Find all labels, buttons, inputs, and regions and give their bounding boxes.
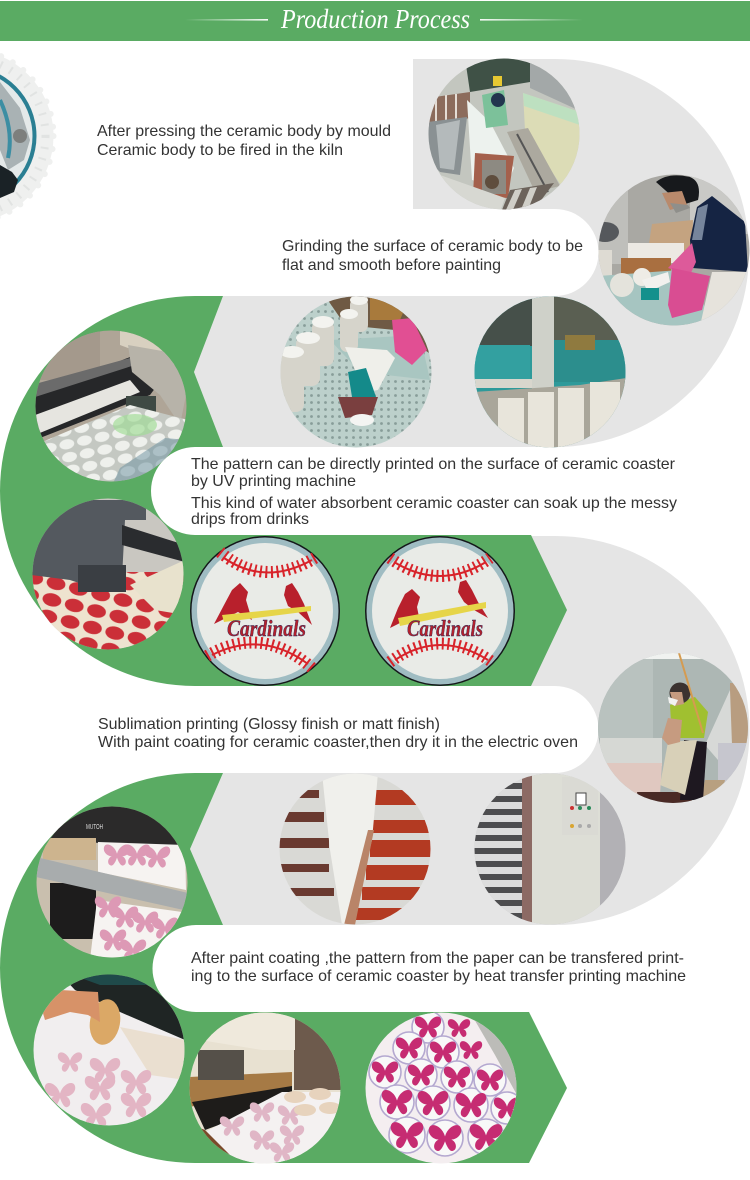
photo: UV printing machine xyxy=(35,330,188,490)
text: step 1 pressing and firing: After pressing the ceramic body by mould xyxy=(97,123,391,140)
photo: UV print on red coasters xyxy=(32,498,185,651)
panel: UV printing green arrow xyxy=(0,296,567,686)
text: step 5 heat transfer: After paint coating ,the pattern from the paper can be transfered print- xyxy=(191,950,684,967)
label: machine brand: MUTOH xyxy=(86,824,103,831)
text: step 3 UV printing: This kind of water absorbent ceramic coaster can soak up the messy xyxy=(191,495,677,512)
photo: red oven racks xyxy=(279,773,431,925)
photo: grinding coaster close-up xyxy=(280,295,432,448)
photo: heat press xyxy=(189,1012,342,1165)
photo: firing kiln xyxy=(474,296,626,450)
text: step 5 heat transfer: ing to the surface of ceramic coaster by heat transfer printing machine xyxy=(191,968,686,985)
heading: Production Process xyxy=(280,4,470,34)
photo: coaster pressed to transfer paper xyxy=(33,974,185,1127)
text: step 3 UV printing: drips from drinks xyxy=(191,511,309,528)
text: step 4 sublimation coating: With paint coating for ceramic coaster,then dry it in the electric oven xyxy=(98,734,578,751)
photo: cardinals coaster right: Cardinals xyxy=(407,616,483,641)
photo: printed butterfly sheet xyxy=(365,1011,523,1164)
text: step 3 UV printing xyxy=(191,456,677,528)
photo: painter spraying coating xyxy=(597,652,750,806)
title banner xyxy=(0,1,750,41)
photo: cardinals coaster right xyxy=(365,536,515,686)
panel: sublimation band xyxy=(190,536,750,925)
photo: cardinals coaster left xyxy=(190,536,340,686)
text: step 2 grinding: Grinding the surface of ceramic body to be xyxy=(282,238,583,255)
photo: ceramic coaster plate xyxy=(0,49,54,223)
text: step 4 sublimation coating: Sublimation printing (Glossy finish or matt finish) xyxy=(98,716,440,733)
text: step 3 UV printing: The pattern can be directly printed on the surface of ceramic coaster xyxy=(191,456,676,473)
panel: kiln and grinding band xyxy=(194,59,749,447)
text: step 1 pressing and firing xyxy=(97,123,391,159)
text: step 5 heat transfer xyxy=(191,950,686,985)
text: step 4 sublimation coating xyxy=(98,716,578,751)
text: step 2 grinding xyxy=(282,238,583,274)
photo: cardinals coaster left: Cardinals xyxy=(227,616,306,641)
photo: worker grinding xyxy=(591,174,750,326)
text: step 2 grinding: flat and smooth before painting xyxy=(282,257,501,274)
photo: paper print machine xyxy=(36,806,189,961)
photo: pressing conveyor xyxy=(428,58,580,215)
panel: heat transfer green arrow xyxy=(0,773,567,1163)
text: step 3 UV printing: by UV printing machine xyxy=(191,473,356,490)
photo: oven control panel xyxy=(474,773,626,925)
text: step 1 pressing and firing: Ceramic body to be fired in the kiln xyxy=(97,142,343,159)
